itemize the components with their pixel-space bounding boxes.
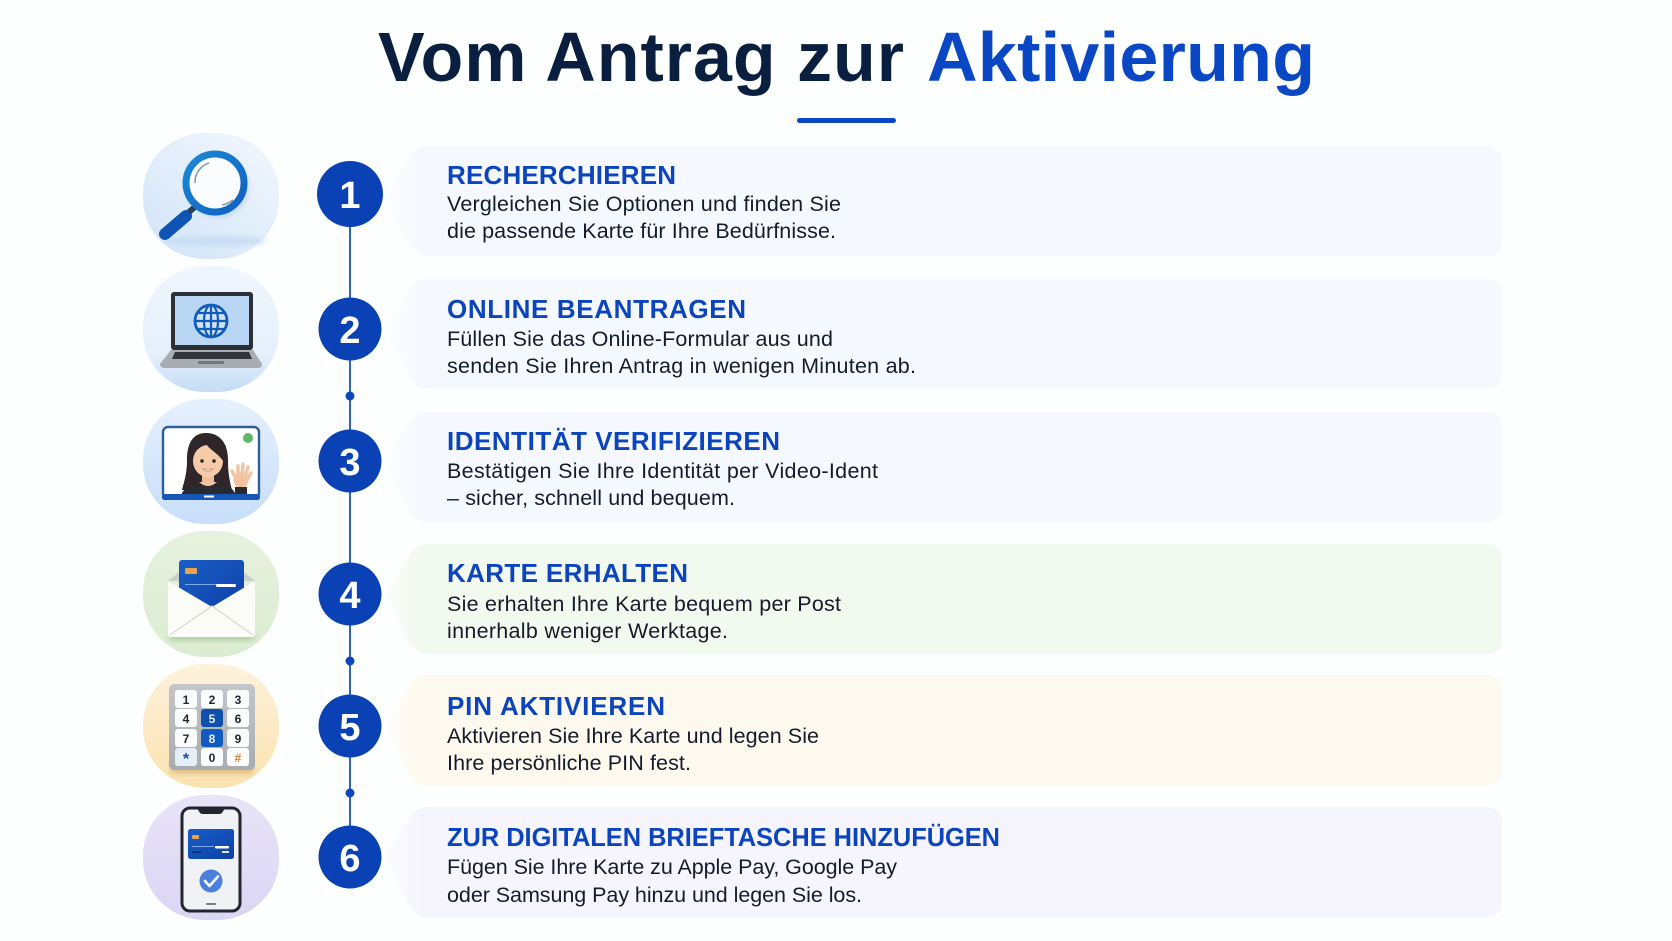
number badge 1 xyxy=(317,161,383,227)
number badge 3: 3 xyxy=(339,442,361,484)
heading: step 1: RECHERCHIEREN xyxy=(447,160,676,190)
title xyxy=(378,18,1315,96)
body text: step 5: Aktivieren Sie Ihre Karte und legen Sie xyxy=(447,724,819,748)
body text: step 3 xyxy=(447,459,878,510)
number badge 3 xyxy=(318,430,382,492)
number badge 6: 6 xyxy=(339,838,361,880)
body text: step 4: innerhalb weniger Werktage. xyxy=(447,619,728,643)
icon: PIN keypad: 2 xyxy=(209,693,216,707)
icon: PIN keypad: 6 xyxy=(235,712,242,726)
step 4: Karte erhalten xyxy=(143,531,1502,657)
body text: step 5: Ihre persönliche PIN fest. xyxy=(447,751,691,775)
icon: PIN keypad: # xyxy=(235,751,242,765)
icon: PIN keypad: 8 xyxy=(209,732,216,746)
icon: envelope with card xyxy=(143,531,279,657)
number badge 4: 4 xyxy=(339,575,361,617)
body text: step 3: Bestätigen Sie Ihre Identität per Video-Ident xyxy=(447,459,878,483)
number badge 6 xyxy=(318,826,382,888)
card: step 1 xyxy=(385,146,1502,256)
icon: PIN keypad: 7 xyxy=(183,732,190,746)
card: step 4 xyxy=(385,544,1502,654)
body text: step 2: senden Sie Ihren Antrag in wenigen Minuten ab. xyxy=(447,354,916,378)
heading: step 3: IDENTITÄT VERIFIZIEREN xyxy=(447,426,780,456)
body text: step 5 xyxy=(447,724,819,775)
card: step 2 xyxy=(385,279,1502,389)
timeline connector xyxy=(346,194,354,857)
icon: PIN keypad: 9 xyxy=(235,732,242,746)
number badge 5: 5 xyxy=(339,707,361,749)
title: Aktivierung xyxy=(927,18,1315,96)
icon: PIN keypad: 0 xyxy=(209,751,216,765)
body text: step 1 xyxy=(447,192,841,243)
card: step 6 xyxy=(385,807,1502,917)
step 1: Recherchieren xyxy=(143,133,1502,259)
step 6: Zur digitalen Brieftasche hinzufügen xyxy=(143,795,1502,920)
icon: smartphone wallet xyxy=(143,795,279,920)
body text: step 6: oder Samsung Pay hinzu und legen Sie los. xyxy=(447,883,862,907)
icon: magnifying glass xyxy=(143,133,279,259)
icon: PIN keypad: 3 xyxy=(235,693,242,707)
body text: step 1: die passende Karte für Ihre Bedürfnisse. xyxy=(447,219,836,243)
number badge 2 xyxy=(318,298,382,360)
body text: step 2: Füllen Sie das Online-Formular aus und xyxy=(447,327,833,351)
number badge 2: 2 xyxy=(339,310,361,352)
step 2: Online beantragen xyxy=(143,266,1502,392)
number badge 5 xyxy=(318,694,382,758)
icon: PIN keypad: 4 xyxy=(183,712,190,726)
heading: step 4: KARTE ERHALTEN xyxy=(447,558,688,588)
body text: step 1: Vergleichen Sie Optionen und finden Sie xyxy=(447,192,841,216)
title underline xyxy=(797,118,896,123)
icon: PIN keypad: 5 xyxy=(209,712,216,726)
step 3: Identität verifizieren xyxy=(143,399,1502,524)
heading: step 6: ZUR DIGITALEN BRIEFTASCHE HINZUFÜGEN xyxy=(447,822,1000,852)
step 5: PIN aktivieren xyxy=(143,664,1502,788)
heading: step 2: ONLINE BEANTRAGEN xyxy=(447,294,746,324)
body text: step 6: Fügen Sie Ihre Karte zu Apple Pay, Google Pay xyxy=(447,855,897,879)
body text: step 4 xyxy=(447,592,841,643)
body text: step 3: – sicher, schnell und bequem. xyxy=(447,486,735,510)
icon: PIN keypad xyxy=(143,664,279,788)
icon: video identification xyxy=(143,399,279,524)
body text: step 2 xyxy=(447,327,916,378)
number badge 4 xyxy=(318,562,382,626)
card: step 3 xyxy=(385,412,1502,522)
title: Vom Antrag zur xyxy=(378,18,904,96)
icon: PIN keypad: * xyxy=(183,751,190,768)
card: step 5 xyxy=(385,675,1502,785)
body text: step 4: Sie erhalten Ihre Karte bequem per Post xyxy=(447,592,841,616)
icon: PIN keypad: 1 xyxy=(183,693,190,707)
body text: step 6 xyxy=(447,855,897,907)
heading: step 5: PIN AKTIVIEREN xyxy=(447,691,665,721)
number badge 1: 1 xyxy=(339,175,361,217)
icon: laptop with globe xyxy=(143,266,279,392)
